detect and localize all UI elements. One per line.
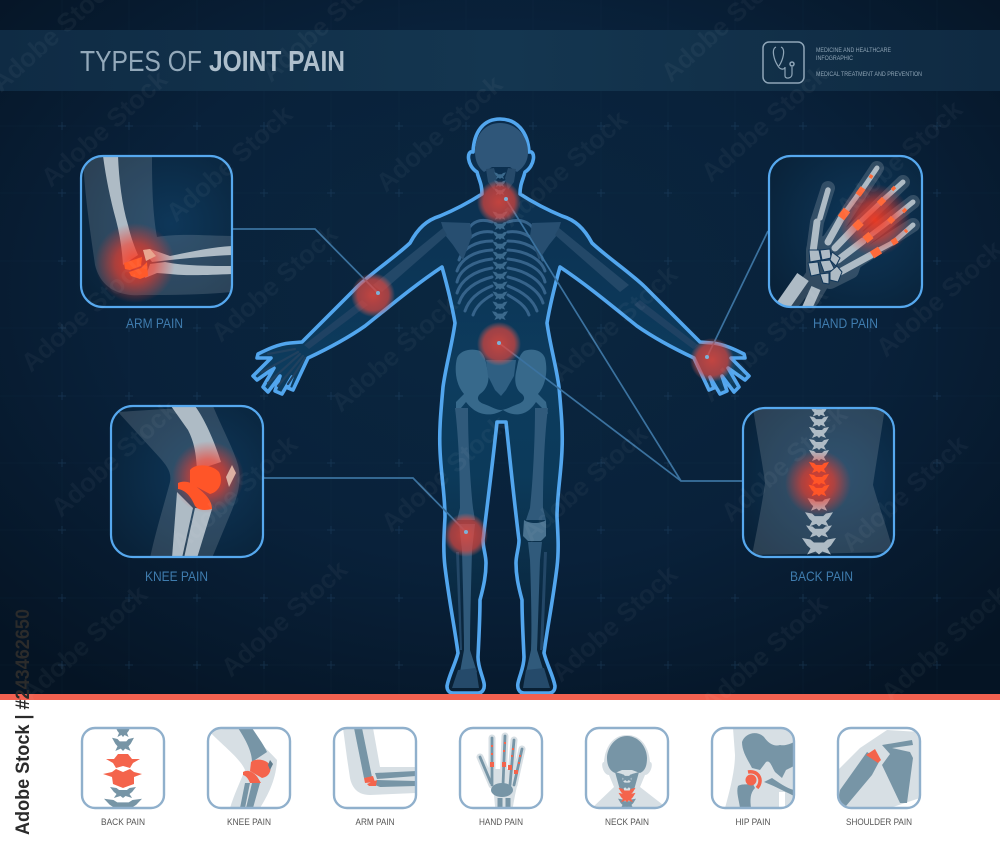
icon card: shoulder pain <box>838 728 920 828</box>
header band <box>0 30 1000 91</box>
hand flesh <box>795 168 913 300</box>
panel: knee pain <box>111 406 263 584</box>
icon card: hand pain: HAND PAIN <box>479 817 523 828</box>
icon card: neck pain <box>586 728 668 828</box>
icon card: shoulder pain: SHOULDER PAIN <box>846 817 912 828</box>
icon card: neck pain: NECK PAIN <box>605 817 649 828</box>
icon card: hip pain <box>712 728 794 828</box>
icon card: arm pain <box>334 728 416 828</box>
icon card: knee pain <box>208 728 290 828</box>
orange divider bar <box>0 694 1000 700</box>
panel: hand pain <box>769 156 922 331</box>
watermark overlay: Adobe Stock <box>160 99 298 228</box>
panel: back pain <box>743 407 894 584</box>
watermark overlay: Adobe Stock <box>830 94 968 223</box>
watermark overlay: Adobe Stock <box>15 249 153 378</box>
white footer <box>0 700 1000 850</box>
watermark overlay: Adobe Stock <box>695 279 833 408</box>
watermark overlay: Adobe Stock <box>15 579 153 708</box>
watermark overlay: Adobe Stock <box>205 219 343 348</box>
panel: knee pain: KNEE PAIN <box>145 568 208 584</box>
watermark overlay: Adobe Stock <box>545 559 683 688</box>
title: TYPES OF <box>80 46 202 78</box>
stock id side text: Adobe Stock | #243462650 <box>13 609 34 835</box>
panel: hand pain: HAND PAIN <box>813 315 878 331</box>
watermark overlay: Adobe Stock <box>165 429 303 558</box>
jaw <box>486 168 516 190</box>
watermark overlay: Adobe Stock <box>515 419 653 548</box>
title <box>80 46 345 78</box>
panel: back pain: BACK PAIN <box>790 568 853 584</box>
watermark overlay: Adobe Stock <box>835 429 973 558</box>
watermark overlay: Adobe Stock <box>35 64 173 193</box>
carpal bones <box>808 249 842 284</box>
icon card: hip pain: HIP PAIN <box>736 817 771 828</box>
spine <box>492 172 508 320</box>
connector end dots <box>376 197 709 534</box>
hand bones <box>262 349 305 386</box>
title: JOINT PAIN <box>209 46 345 78</box>
skull <box>475 123 528 172</box>
icon: stethoscope <box>763 42 804 83</box>
watermark overlay: Adobe Stock <box>695 59 833 188</box>
watermark overlay: Adobe Stock <box>695 589 833 718</box>
connector lines <box>233 199 768 532</box>
panel: arm pain <box>81 156 232 331</box>
shoulder blades and arm bones <box>304 222 698 349</box>
left leg bones <box>452 408 479 688</box>
header info text <box>816 48 922 78</box>
icon card: knee pain: KNEE PAIN <box>227 817 271 828</box>
body outline <box>253 119 749 693</box>
header info text: INFOGRAPHIC <box>816 56 854 62</box>
watermark overlay: Adobe Stock <box>45 394 183 523</box>
watermark overlay: Adobe Stock <box>545 259 683 388</box>
watermark overlay: Adobe Stock <box>370 69 508 198</box>
icon card: hand pain <box>460 728 542 828</box>
watermark overlay: Adobe Stock <box>715 399 853 528</box>
header info text: MEDICAL TREATMENT AND PREVENTION <box>816 72 922 78</box>
watermark overlay: Adobe Stock <box>495 104 633 233</box>
panel: arm pain: ARM PAIN <box>126 315 183 331</box>
pain glow spots <box>351 180 734 557</box>
sacrum <box>486 360 516 396</box>
watermark overlay: Adobe Stock <box>215 554 353 683</box>
watermark overlay: Adobe Stock <box>375 409 513 538</box>
header info text: MEDICINE AND HEALTHCARE <box>816 48 891 54</box>
pelvis <box>456 350 548 414</box>
right leg bones <box>523 408 550 688</box>
icon card: back pain <box>82 726 164 828</box>
watermark overlay: Adobe Stock <box>325 289 463 418</box>
icon card: arm pain: ARM PAIN <box>356 817 395 828</box>
ribs <box>457 220 545 315</box>
icon card: back pain: BACK PAIN <box>101 817 145 828</box>
human body figure <box>253 119 749 693</box>
